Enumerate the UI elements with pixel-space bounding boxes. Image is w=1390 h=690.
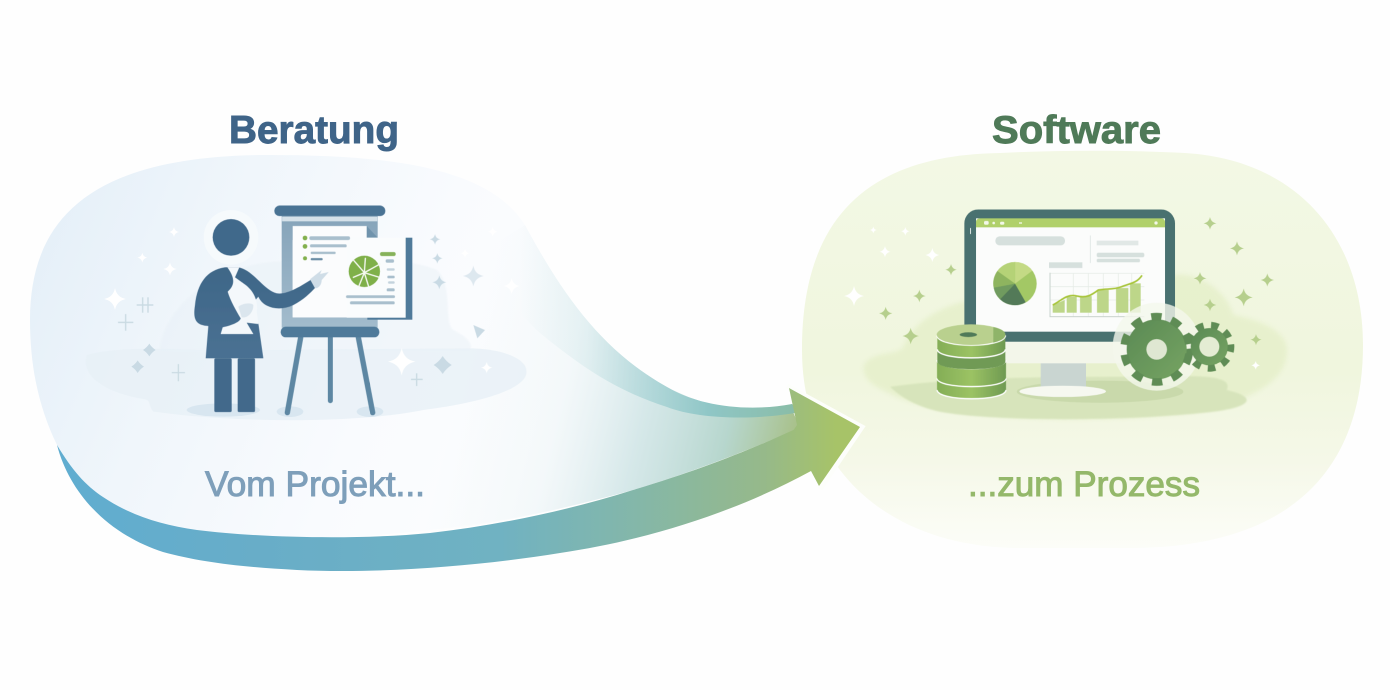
shirt and hand <box>221 267 258 334</box>
person <box>194 210 329 412</box>
caption: Vom Projekt: Vom Projekt... <box>205 465 425 504</box>
sparkles <box>104 227 520 375</box>
dashboard placeholders <box>995 236 1144 268</box>
panel: beratung backdrop <box>30 155 800 539</box>
sheet with pie chart <box>367 238 412 320</box>
area and line chart <box>1050 273 1144 317</box>
database <box>937 324 1006 399</box>
monitor <box>1003 340 1127 363</box>
ground and hill <box>86 261 527 420</box>
flip chart board <box>282 216 378 328</box>
large gear <box>1120 312 1194 386</box>
sparkles <box>879 217 1274 345</box>
arrow: main ribbon and head <box>57 386 862 571</box>
heading: Software: Software <box>992 109 1161 152</box>
small gear <box>1186 323 1233 370</box>
flip chart easel <box>287 337 373 413</box>
heading: Beratung: Beratung <box>229 109 399 152</box>
pie chart <box>993 262 1037 305</box>
panel: software backdrop <box>802 151 1363 548</box>
illustration: presenter at flip chart <box>86 206 527 420</box>
gears <box>1113 303 1233 391</box>
arrow connector: fading flow into arrow <box>400 225 800 535</box>
caption: zum Prozess: ...zum Prozess <box>968 465 1200 504</box>
illustration: monitor, database and gears <box>844 209 1287 419</box>
ground and hill <box>863 275 1287 419</box>
arrow: upper ribbon <box>470 225 800 417</box>
